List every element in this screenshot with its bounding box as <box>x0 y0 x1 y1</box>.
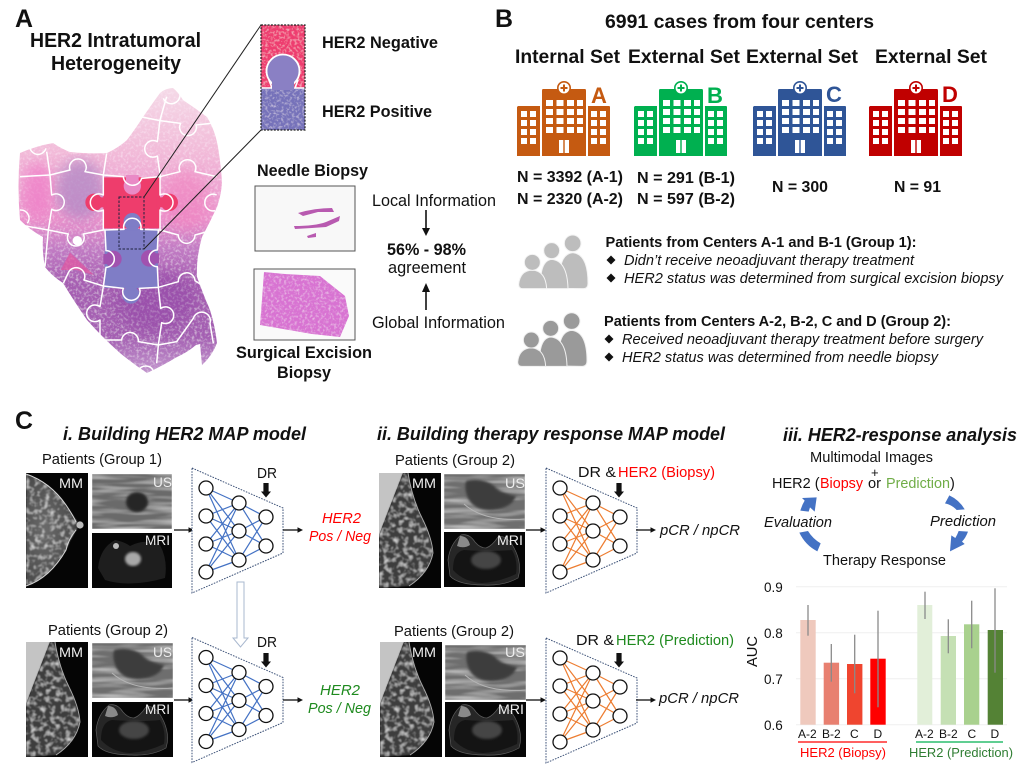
group underline: biopsy <box>798 741 887 743</box>
patients group 2 label, therapy biopsy row: Patients (Group 2) <box>395 453 515 469</box>
arrowhead down <box>422 228 430 236</box>
icon: hospital B: B <box>707 83 723 108</box>
red puzzle piece <box>85 177 178 228</box>
image labels therapy prediction row: MM <box>412 644 436 660</box>
y axis labels: 0.8 <box>764 626 783 641</box>
y axis title: AUC <box>745 636 761 667</box>
hollow transfer arrow <box>233 582 248 647</box>
case counts: N = 291 (B-1) <box>637 170 735 187</box>
icon: hospital D: D <box>942 82 958 107</box>
output: HER2 Pos/Neg red: Pos / Neg <box>309 528 372 545</box>
group 2 text <box>604 314 984 366</box>
heading: HER2 Intratumoral Heterogeneity: Heterogeneity <box>51 53 182 75</box>
set labels: External Set <box>746 47 859 68</box>
icon: hospital D <box>869 82 962 156</box>
network: therapy model prediction <box>546 638 637 763</box>
notches in blue piece <box>103 250 159 267</box>
arrow up to agreement <box>425 291 427 310</box>
tissue hole <box>73 236 82 245</box>
x axis labels: D <box>990 727 1000 741</box>
agreement text <box>387 241 467 277</box>
label: HER2 Positive: HER2 Positive <box>322 103 432 121</box>
group 1 text <box>606 235 1004 287</box>
label: DR: DR <box>257 466 277 482</box>
heading: HER2 Intratumoral Heterogeneity: HER2 Intratumoral <box>30 30 201 52</box>
panel A: HER2 intratumoral heterogeneity <box>15 5 505 382</box>
image labels group 1 <box>59 474 172 548</box>
icon: hospital A: A <box>591 83 607 108</box>
x axis labels: C <box>968 727 976 741</box>
heading iii: iii. HER2-response analysis <box>783 425 1017 445</box>
image labels group 2: MM <box>59 644 83 660</box>
error bars <box>808 588 995 707</box>
cycle diagram: HER2-response analysis: + <box>871 465 879 480</box>
set labels: Internal Set <box>515 47 621 68</box>
network: therapy model biopsy <box>546 468 637 593</box>
cycle diagram: HER2-response analysis: Evaluation <box>764 515 832 531</box>
cycle diagram: HER2-response analysis: Biopsy <box>820 476 864 492</box>
set labels <box>515 47 988 68</box>
image labels therapy biopsy row: US <box>505 475 525 491</box>
DR arrow <box>261 653 271 668</box>
notch over red piece <box>124 175 141 195</box>
output: HER2 Pos/Neg red <box>309 510 372 545</box>
inset: HER2 negative and positive regions <box>261 25 305 130</box>
output pCR / npCR: pCR / npCR <box>659 522 740 539</box>
y axis labels: 0.9 <box>764 580 783 595</box>
y axis labels: 0.6 <box>764 718 783 733</box>
arrow down to agreement <box>425 210 427 229</box>
cycle diagram: HER2-response analysis: Therapy Response <box>823 553 946 569</box>
group 1 text: Didn’t receive neoadjuvant therapy treatment <box>624 253 915 269</box>
case counts: N = 2320 (A-2) <box>517 191 623 208</box>
case counts <box>517 169 941 208</box>
label: DR: DR <box>257 635 277 651</box>
network: HER2 model group 1 <box>192 468 283 593</box>
image labels group 2: US <box>153 644 172 660</box>
heading i: i. Building HER2 MAP model <box>63 424 307 444</box>
zoom lines to inset <box>144 25 261 249</box>
agreement text: agreement <box>388 259 467 277</box>
label: Local Information: Local Information <box>372 192 496 210</box>
arrowhead up <box>422 283 430 292</box>
icon: patients group 2 <box>518 313 587 366</box>
label: Surgical Excision Biopsy <box>236 344 372 382</box>
case counts: N = 300 <box>772 179 828 196</box>
arrow out of network <box>283 697 303 703</box>
images: group 1 MM, US, MRI <box>26 473 172 588</box>
set labels: External Set <box>875 47 988 68</box>
output: HER2 Pos/Neg red: HER2 <box>322 510 362 527</box>
case counts: N = 3392 (A-1) <box>517 169 623 186</box>
label: Global Information: Global Information <box>372 314 505 332</box>
images: therapy prediction row <box>380 642 526 757</box>
icon: patients group 1 <box>519 235 588 289</box>
image labels therapy biopsy row <box>412 475 525 548</box>
x axis labels: A-2 <box>798 727 817 741</box>
icon: hospital B <box>634 82 727 156</box>
image labels therapy biopsy row: MM <box>412 475 436 491</box>
panel letter B: B <box>495 5 513 33</box>
DR arrow <box>614 483 624 498</box>
agreement text: 56% - 98% <box>387 241 466 259</box>
cycle diagram: HER2-response analysis: Prediction <box>930 514 996 530</box>
x axis labels <box>798 727 1000 741</box>
x axis labels: C <box>850 727 859 741</box>
DR arrow <box>614 653 624 668</box>
group 2 text: Patients from Centers A-2, B-2, C and D (Group 2): <box>604 314 951 330</box>
image labels group 1: MRI <box>145 532 170 548</box>
icon: hospital A <box>517 82 610 156</box>
heading: 6991 cases: 6991 cases from four centers <box>605 11 874 33</box>
label: DR & HER2 (Biopsy) <box>578 465 715 481</box>
blue puzzle piece <box>105 213 158 304</box>
images: therapy biopsy row <box>379 473 525 588</box>
image labels group 1: US <box>153 474 172 490</box>
icon: hospital C: C <box>826 82 842 107</box>
output: HER2 Pos/Neg green: HER2 <box>320 682 361 699</box>
group label: prediction: HER2 (Prediction) <box>909 745 1013 760</box>
arrow out of network <box>636 527 656 533</box>
set labels: External Set <box>628 47 741 68</box>
arrow out of network <box>636 697 656 703</box>
y axis labels: 0.7 <box>764 672 783 687</box>
panel letter C: C <box>15 407 33 435</box>
patients group 2 label, therapy prediction row: Patients (Group 2) <box>394 624 514 640</box>
heading ii: ii. Building therapy response MAP model <box>377 424 726 444</box>
arrow into network <box>526 527 546 533</box>
label: Surgical Excision Biopsy: Biopsy <box>277 364 331 382</box>
output: HER2 Pos/Neg green <box>308 682 372 717</box>
group 1 text: Patients from Centers A-1 and B-1 (Group 1): <box>606 235 916 251</box>
group 1 text: HER2 status was determined from surgical excision biopsy <box>624 271 1004 287</box>
cycle diagram: HER2-response analysis: Prediction <box>886 476 950 492</box>
heading: HER2 Intratumoral Heterogeneity <box>30 30 201 75</box>
pink triangle region <box>61 253 94 275</box>
DR arrow <box>261 483 271 498</box>
label: DR & HER2 (Biopsy): DR & <box>578 465 616 481</box>
arrow into network <box>174 697 194 703</box>
x axis labels: D <box>874 727 882 741</box>
image labels therapy prediction row <box>412 644 525 717</box>
case counts: N = 91 <box>894 179 941 196</box>
bar chart: AUC <box>745 580 1013 760</box>
output: HER2 Pos/Neg green: Pos / Neg <box>308 700 372 717</box>
tissue slide with puzzle overlay <box>15 85 225 377</box>
x axis labels: B-2 <box>939 727 958 741</box>
label: DR & HER2 (Prediction): DR & <box>576 633 614 649</box>
panel B: cases from four centers <box>495 5 1004 366</box>
x axis labels: B-2 <box>822 727 841 741</box>
group 2 text: HER2 status was determined from needle biopsy <box>622 350 939 366</box>
group underline: prediction <box>916 741 1003 743</box>
label: DR & HER2 (Biopsy): HER2 (Biopsy) <box>618 465 715 481</box>
label: Needle Biopsy: Needle Biopsy <box>257 162 368 180</box>
patients group 2 label: Patients (Group 2) <box>48 623 168 639</box>
label: Surgical Excision Biopsy: Surgical Excision <box>236 344 372 362</box>
arrow into network <box>174 527 194 533</box>
cycle diagram: HER2-response analysis: Multimodal Images <box>810 450 933 466</box>
image labels group 2 <box>59 644 172 717</box>
arrow into network <box>526 697 546 703</box>
image labels therapy prediction row: MRI <box>498 701 524 717</box>
panel letter A: A <box>15 5 33 33</box>
image labels therapy biopsy row: MRI <box>497 532 523 548</box>
cycle diagram: HER2-response analysis: ) <box>950 476 955 492</box>
cycle diagram: HER2-response analysis: or <box>868 476 881 492</box>
cycle diagram: HER2-response analysis: HER2 ( <box>772 476 820 492</box>
arrow out of network <box>283 527 303 533</box>
group 2 text: Received neoadjuvant therapy treatment before surgery <box>622 332 984 348</box>
dashed selection box on tissue <box>119 197 144 249</box>
image labels group 1: MM <box>59 475 83 491</box>
needle biopsy slide <box>255 186 355 251</box>
images: group 2 MM, US, MRI <box>26 642 173 757</box>
cycle diagram: HER2-response analysis <box>764 450 996 569</box>
surgical excision slide <box>254 269 355 340</box>
image labels therapy prediction row: US <box>505 644 525 660</box>
label: DR & HER2 (Prediction): HER2 (Prediction) <box>616 633 734 649</box>
case counts: N = 597 (B-2) <box>637 191 735 208</box>
output pCR / npCR: pCR / npCR <box>658 690 739 707</box>
network: HER2 model group 2 <box>192 638 283 762</box>
label: HER2 Negative: HER2 Negative <box>322 34 438 52</box>
bars <box>800 605 1003 725</box>
icon: hospital C <box>753 82 846 156</box>
panel C: model building <box>15 407 1017 763</box>
x axis labels: A-2 <box>915 727 934 741</box>
group label: biopsy: HER2 (Biopsy) <box>800 745 886 760</box>
image labels group 2: MRI <box>145 701 170 717</box>
y axis labels <box>764 580 783 733</box>
patients group 1 label: Patients (Group 1) <box>42 452 162 468</box>
